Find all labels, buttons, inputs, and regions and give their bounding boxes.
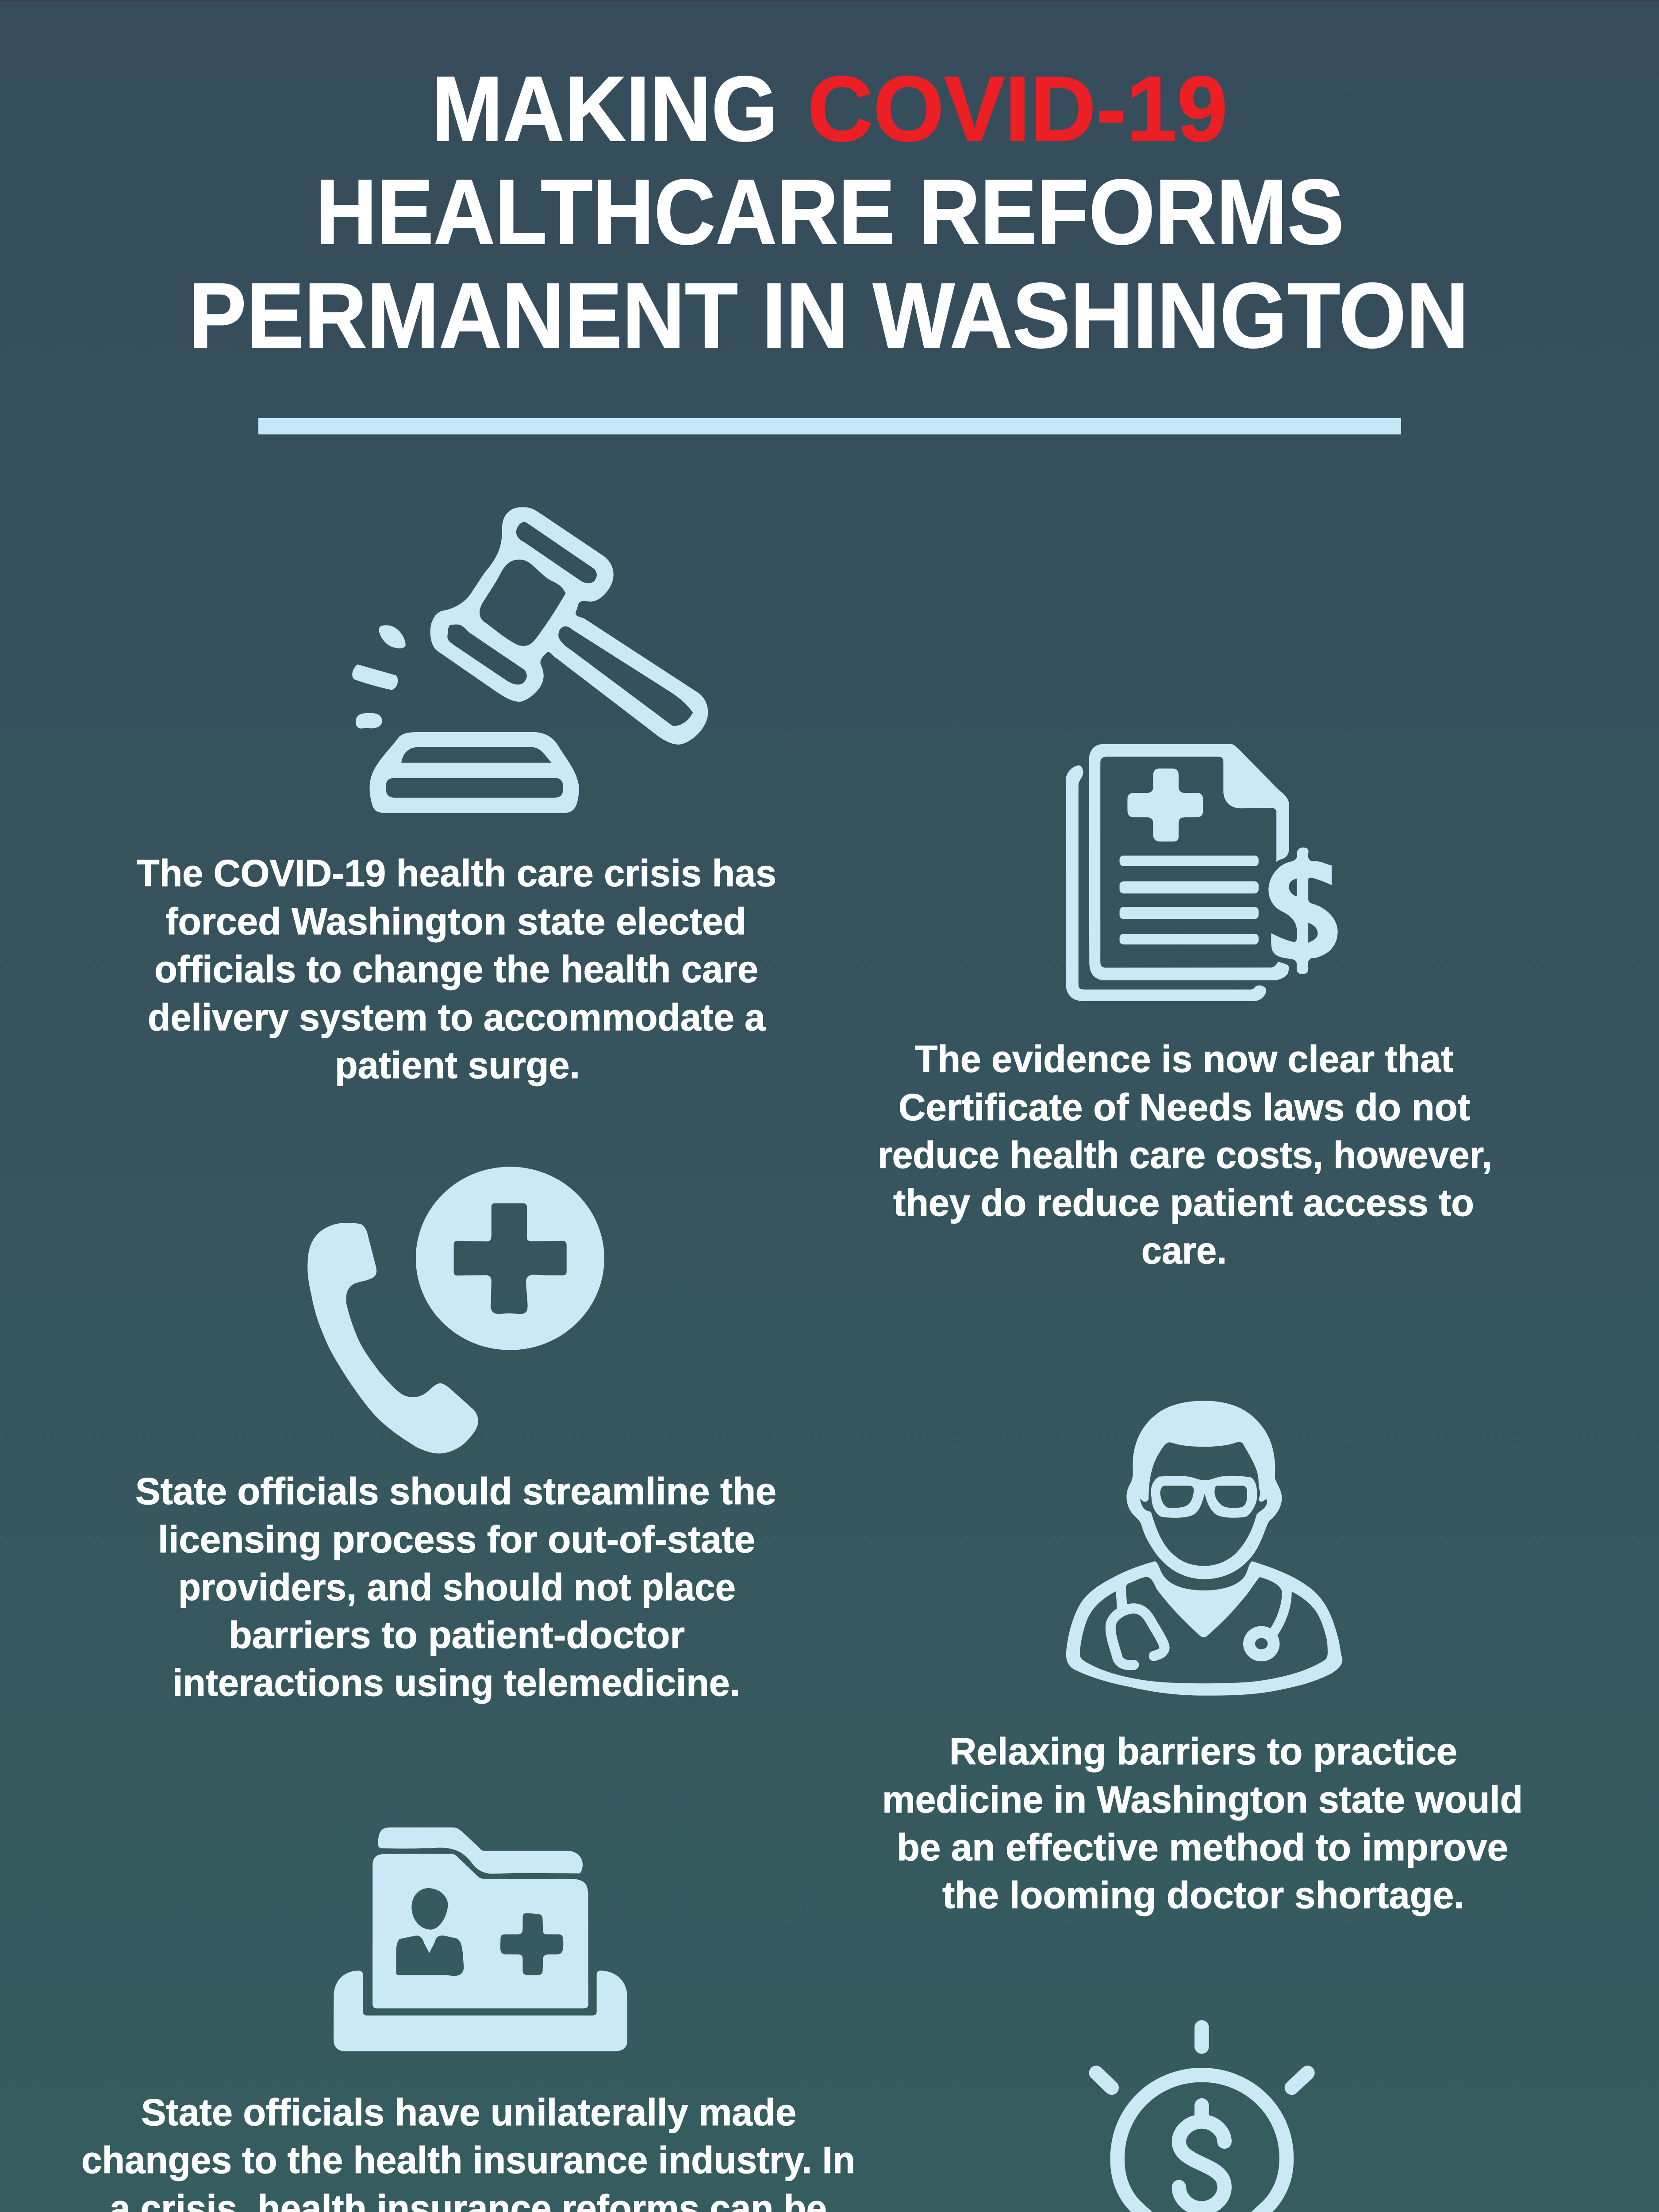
text: telemedicine: providers, and should not place: [178, 1567, 736, 1609]
icon: light bulb with dollar sign: [1096, 2028, 1308, 2212]
icon: medical folder in tray: [334, 1828, 627, 2051]
text: telemedicine: State officials should streamline the: [135, 1471, 776, 1513]
title divider bar: [258, 418, 1401, 434]
text: insurance: [81, 2092, 855, 2212]
text: certificate of need: The evidence is now clear that: [915, 1038, 1453, 1080]
text: crisis: [137, 853, 776, 1087]
icon: phone with medical cross: [307, 1167, 604, 1453]
text: doctor shortage: be an effective method to improve: [897, 1827, 1508, 1869]
text: certificate of need: reduce health care costs, however,: [878, 1134, 1492, 1176]
panel: tort reform: [888, 2028, 1482, 2212]
text: telemedicine: licensing process for out-of-state: [158, 1519, 755, 1561]
icon: doctor with stethoscope: [1066, 1401, 1342, 1696]
text: certificate of need: [878, 1038, 1492, 1272]
panel: certificate of need: [878, 744, 1492, 1272]
panel: telemedicine: [135, 1167, 776, 1704]
title: [188, 58, 1469, 367]
text: certificate of need: Certificate of Needs laws do not: [899, 1087, 1470, 1129]
text: crisis: The COVID-19 health care crisis has: [137, 853, 776, 895]
icon: gavel: [352, 507, 708, 813]
text: doctor shortage: medicine in Washington state would: [882, 1779, 1523, 1821]
text: insurance: State officials have unilaterally made: [141, 2092, 796, 2134]
text: doctor shortage: the looming doctor shortage.: [942, 1874, 1464, 1916]
panel: insurance: [81, 1828, 855, 2212]
panel: doctor shortage: [882, 1401, 1523, 1916]
text: crisis: officials to change the health care: [154, 949, 758, 991]
text: telemedicine: barriers to patient-doctor: [229, 1614, 685, 1656]
title: MAKING: [432, 58, 778, 161]
text: certificate of need: they do reduce patient access to: [893, 1182, 1474, 1224]
text: crisis: delivery system to accommodate a: [148, 997, 766, 1039]
panel: crisis: [137, 507, 776, 1087]
text: insurance: changes to the health insurance industry. In: [81, 2139, 855, 2181]
text: crisis: patient surge.: [335, 1045, 580, 1087]
text: doctor shortage: [882, 1731, 1523, 1916]
title: COVID-19: [807, 58, 1228, 161]
title: PERMANENT IN WASHINGTON: [188, 264, 1469, 367]
text: crisis: forced Washington state elected: [165, 901, 746, 943]
text: telemedicine: [135, 1471, 776, 1704]
icon: medical bill with dollar sign: [1066, 744, 1338, 1001]
title: HEALTHCARE REFORMS: [315, 161, 1344, 264]
text: telemedicine: interactions using telemedicine.: [173, 1662, 740, 1704]
text: certificate of need: care.: [1141, 1230, 1227, 1272]
text: doctor shortage: Relaxing barriers to practice: [949, 1731, 1457, 1773]
